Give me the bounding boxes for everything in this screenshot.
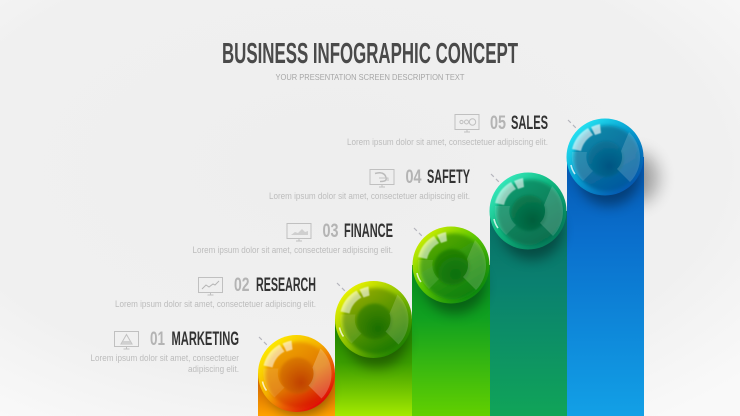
bar 1 orange [258,373,336,416]
row 05 sales [347,113,548,147]
bar 3 bright green [412,265,490,416]
icon: monitor with swirl [370,170,394,187]
row 04 safety [269,167,470,201]
icon: monitor with line chart [198,278,222,295]
row 03 finance [192,221,393,255]
description [90,353,239,374]
number 01: 01 [150,329,165,350]
number 05: 05 [490,113,506,134]
title: BUSINESS INFOGRAPHIC CONCEPT [222,38,518,70]
number 03: 03 [322,221,338,242]
heading marketing: MARKETING [172,329,239,350]
icon: monitor with circles [455,114,479,132]
sphere 5 blue [566,118,644,196]
leader dashes [259,120,578,347]
row 02 research [115,275,316,309]
sphere shadows on bars [270,150,639,416]
icon: monitor with pyramid [114,332,138,349]
description: Lorem ipsum dolor sit amet, consectetuer adipiscing elit. [115,299,316,309]
number 04: 04 [406,167,422,188]
sphere 4 teal [490,172,566,250]
heading sales: SALES [511,113,548,134]
subtitle: YOUR PRESENTATION SCREEN DESCRIPTION TEXT [276,72,464,82]
row 01 marketing [90,329,239,374]
bar 4 teal [490,211,568,416]
description: Lorem ipsum dolor sit amet, consectetuer [90,353,239,363]
description: adipiscing elit. [188,364,239,374]
sphere 2 lime [335,281,412,358]
bar 5 blue [567,157,644,416]
sphere 1 orange [258,335,335,412]
description: Lorem ipsum dolor sit amet, consectetuer adipiscing elit. [269,191,470,201]
heading research: RESEARCH [256,275,316,296]
bar 2 green [335,319,412,416]
icon: monitor with area chart [287,224,311,241]
number 02: 02 [234,275,250,296]
heading safety: SAFETY [427,167,470,188]
sphere 3 green [412,226,490,304]
description: Lorem ipsum dolor sit amet, consectetuer adipiscing elit. [192,245,393,255]
shadow: right of blue bar [615,152,659,204]
description: Lorem ipsum dolor sit amet, consectetuer adipiscing elit. [347,137,548,147]
heading finance: FINANCE [344,221,393,242]
